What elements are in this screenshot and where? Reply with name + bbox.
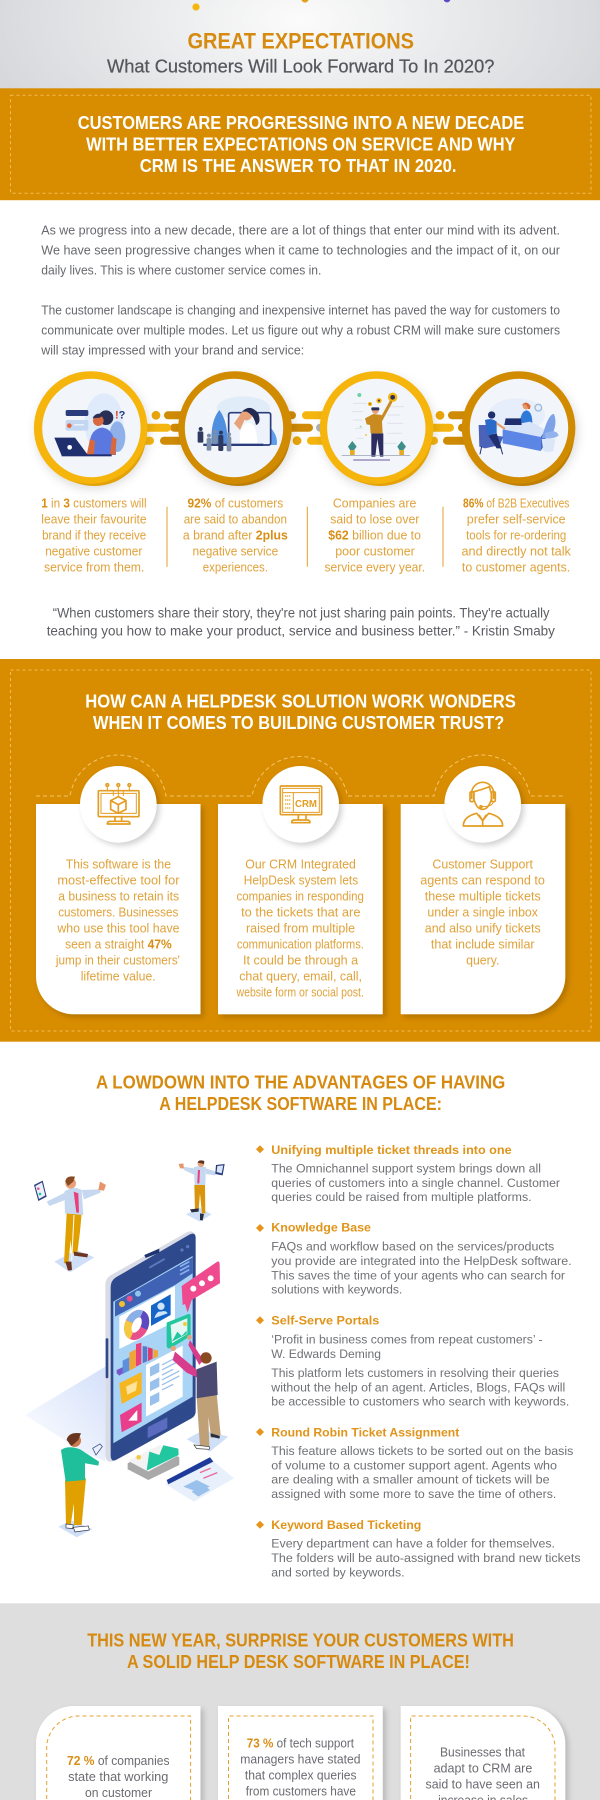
intro text: will stay impressed with your brand and service: [40, 343, 304, 357]
card text: query. [466, 952, 499, 967]
icon: support agent circle: !? [115, 409, 126, 421]
card text [420, 856, 545, 967]
card text: HelpDesk system lets [244, 872, 358, 887]
stat: 86% of B2B executives: to customer agents. [462, 560, 570, 575]
card: 72 percent: state that working [68, 1769, 168, 1784]
icon: losing money circle [320, 371, 433, 486]
icon: monitor with cube [98, 784, 139, 824]
item: knowledge base: This saves the time of your agents who can search for [271, 1268, 565, 1282]
card text: and also unify tickets [425, 920, 541, 935]
card: 73 percent [218, 1706, 383, 1800]
stat: 86% of B2B executives: 86% of B2B Executives [463, 496, 569, 511]
item: round robin [256, 1425, 573, 1501]
banner heading: CUSTOMERS ARE PROGRESSING INTO A NEW DECADE [78, 112, 524, 133]
card: CRM sales [401, 1706, 565, 1800]
card text: Customer Support [432, 856, 533, 871]
card: CRM sales: adapt to CRM are [434, 1761, 532, 1776]
quote: teaching you how to make your product, service and business better.” - Kristin Smaby [47, 623, 556, 639]
icon: frustrated customer circle [178, 371, 292, 486]
stat: 86% of B2B executives [462, 496, 571, 575]
advantages heading: A LOWDOWN INTO THE ADVANTAGES OF HAVING [96, 1072, 505, 1093]
card text: lifetime value. [81, 968, 156, 983]
stat: 86% of B2B executives: tools for re-ordering [466, 528, 566, 543]
title: GREAT EXPECTATIONS [188, 28, 414, 53]
stat: 92% of customers: experiences. [203, 560, 268, 575]
advantages heading: A HELPDESK SOFTWARE IN PLACE: [159, 1093, 442, 1114]
card text: a business to retain its [58, 888, 179, 903]
card: CRM integrated helpdesk [218, 766, 383, 1014]
item: self-serve portals: ‘Profit in business comes from repeat customers’ - [271, 1332, 543, 1346]
item: unifying threads: queries of customers into a single channel. Customer [271, 1176, 560, 1190]
stat: 1 in 3 customers: negative customer [45, 544, 143, 559]
stat: 92% of customers: are said to abandon [184, 512, 287, 527]
card text: that include similar [431, 936, 535, 951]
item: keyword ticketing: Every department can have a folder for themselves. [271, 1537, 555, 1551]
card text: agents can respond to [420, 872, 545, 887]
card: 72 percent: 72 % of companies [67, 1753, 170, 1768]
icon: headset agent [463, 782, 503, 826]
stat: 1 in 3 customers: leave their favourite [41, 512, 147, 527]
helpdesk heading: WHEN IT COMES TO BUILDING CUSTOMER TRUST? [93, 712, 504, 733]
person: top left with tablet [34, 1176, 106, 1272]
item: round robin: Round Robin Ticket Assignment [271, 1425, 459, 1439]
card: 73 percent: that complex queries [245, 1767, 357, 1782]
item: self-serve portals: W. Edwards Deming [271, 1347, 381, 1361]
icon: support agent circle [34, 371, 148, 486]
card: 72 percent [36, 1706, 200, 1800]
stat: 92% of customers: a brand after 2plus [183, 528, 288, 543]
item: keyword ticketing: and sorted by keywords. [271, 1565, 405, 1579]
item: unifying threads: queries could be raised from multiple platforms. [271, 1190, 532, 1204]
stat: 92% of customers: 92% of customers [188, 496, 283, 511]
stat: 86% of B2B executives: and directly not talk [462, 544, 571, 559]
card: 73 percent: 73 % of tech support [247, 1735, 354, 1750]
document sheet [165, 1457, 234, 1502]
photo stack [128, 1445, 179, 1480]
card text: customers. Businesses [58, 904, 178, 919]
card: CRM sales: said to have seen an [426, 1777, 540, 1792]
helpdesk heading [85, 690, 516, 733]
icon: self-service office circle [462, 371, 575, 486]
item: self-serve portals: without the help of an agent. Articles, Blogs, FAQs will [270, 1380, 565, 1394]
icon: CRM monitor [280, 786, 322, 823]
stat: 1 in 3 customers: brand if they receive [42, 528, 146, 543]
advantages heading [96, 1072, 505, 1114]
quote: “When customers share their story, they're not just sharing pain points. They're actually [53, 606, 550, 622]
item: self-serve portals: be accessible to customers who search with keywords. [271, 1395, 569, 1409]
bar chart [117, 1343, 158, 1376]
donut chart [124, 1311, 149, 1339]
stat: $62 billion lost: $62 billion due to [328, 528, 421, 543]
intro text: daily lives. This is where customer service comes in. [41, 263, 321, 277]
stat: $62 billion lost [324, 496, 425, 575]
card: 72 percent: on customer [85, 1785, 153, 1800]
card text: Our CRM Integrated [245, 856, 356, 871]
stat: 1 in 3 customers [41, 496, 147, 575]
panel: helpdesk trust [0, 659, 600, 1042]
card text: raised from multiple [246, 920, 355, 935]
stat: 86% of B2B executives: prefer self-service [467, 512, 566, 527]
banner heading [78, 112, 524, 176]
item: keyword ticketing: Keyword Based Ticketing [271, 1518, 421, 1532]
card: 73 percent: from customers have [246, 1783, 356, 1798]
stat: 92% of customers [183, 496, 288, 575]
intro text: communicate over multiple modes. Let us figure out why a robust CRM will make sure customers [41, 323, 560, 337]
item: self-serve portals: This platform lets customers in resolving their queries [271, 1366, 559, 1380]
item: self-serve portals: Self-Serve Portals [271, 1314, 379, 1328]
banner heading: WITH BETTER EXPECTATIONS ON SERVICE AND WHY [86, 134, 516, 155]
card text: most-effective tool for [57, 872, 180, 887]
banner heading: CRM IS THE ANSWER TO THAT IN 2020. [140, 155, 456, 176]
item: keyword ticketing [256, 1518, 581, 1579]
card: retain customers [36, 766, 200, 1014]
card text [236, 856, 364, 999]
header section [0, 0, 600, 89]
item: knowledge base: you provide are integrated into the HelpDesk software. [271, 1254, 572, 1268]
card text: communication platforms. [237, 936, 364, 951]
person: right touching screen [171, 1335, 228, 1452]
intro text [40, 223, 560, 357]
stat: $62 billion lost: Companies are [333, 496, 416, 511]
quote [47, 606, 556, 639]
subtitle: What Customers Will Look Forward To In 2020? [107, 56, 494, 77]
stat: $62 billion lost: service every year. [324, 560, 425, 575]
advantages list [256, 1143, 581, 1579]
person: bottom left with phone [58, 1433, 102, 1537]
item: knowledge base: FAQs and workflow based on the services/products [271, 1240, 554, 1254]
card text: chat query, email, call, [239, 968, 362, 983]
phone body and screen [105, 1231, 196, 1462]
item: knowledge base [256, 1221, 572, 1297]
item: unifying threads: The Omnichannel support system brings down all [271, 1161, 541, 1175]
card text: these multiple tickets [425, 888, 541, 903]
stat: 1 in 3 customers: service from them. [44, 560, 144, 575]
icon: CRM monitor: CRM [295, 799, 317, 810]
item: round robin: This feature allows tickets to be sorted out on the basis [271, 1444, 573, 1458]
card text: under a single inbox [427, 904, 539, 919]
card text: to the tickets that are [241, 904, 360, 919]
item: knowledge base: Knowledge Base [271, 1221, 371, 1235]
card text: companies in responding [236, 888, 364, 903]
item: unifying threads [256, 1143, 560, 1204]
connector pills between circles [140, 411, 475, 445]
card text: seen a straight 47% [65, 936, 172, 951]
card text: This software is the [66, 856, 171, 871]
card text: website form or social post. [236, 984, 364, 999]
illustration: smartphone and people [25, 1160, 234, 1537]
intro text: The customer landscape is changing and inexpensive internet has paved the way for customers to [41, 303, 560, 317]
item: self-serve portals [256, 1314, 569, 1409]
item: knowledge base: solutions with keywords. [271, 1283, 402, 1297]
card text: jump in their customers' [55, 952, 180, 967]
card text: It could be through a [243, 952, 359, 967]
intro text: We have seen progressive changes when it came to technologies and the impact of it, on our [41, 243, 560, 257]
intro text: As we progress into a new decade, there are a lot of things that enter our mind with its advent. [41, 223, 560, 237]
panel: new year section [0, 1603, 600, 1800]
item: round robin: are dealing with a smaller amount of tickets will be [271, 1473, 550, 1487]
person: top right with tablet [179, 1160, 225, 1222]
helpdesk heading: HOW CAN A HELPDESK SOLUTION WORK WONDERS [85, 690, 516, 711]
panel: intro banner [0, 88, 600, 200]
item: unifying threads: Unifying multiple ticket threads into one [271, 1143, 512, 1157]
new year heading: A SOLID HELP DESK SOFTWARE IN PLACE! [127, 1651, 470, 1672]
card: 73 percent: managers have stated [240, 1751, 360, 1766]
item: round robin: assigned with some more to save the time of others. [271, 1487, 556, 1501]
card: CRM sales: Businesses that [440, 1745, 525, 1760]
speech bubble [182, 1261, 220, 1313]
item: keyword ticketing: The folders will be auto-assigned with brand new tickets [271, 1551, 581, 1565]
image tile [167, 1314, 191, 1349]
stats captions [41, 496, 571, 575]
card: customer support agents [401, 766, 565, 1014]
item: round robin: of volume to a customer support agent. Agents who [271, 1458, 557, 1472]
stat: 92% of customers: negative service [192, 544, 278, 559]
new year heading: THIS NEW YEAR, SURPRISE YOUR CUSTOMERS WITH [87, 1630, 514, 1651]
stat: 1 in 3 customers: 1 in 3 customers will [41, 496, 147, 511]
new year heading [87, 1630, 514, 1672]
card text: who use this tool have [56, 920, 180, 935]
stat: $62 billion lost: said to lose over [330, 512, 420, 527]
card text [55, 856, 180, 983]
stat: $62 billion lost: poor customer [335, 544, 416, 559]
